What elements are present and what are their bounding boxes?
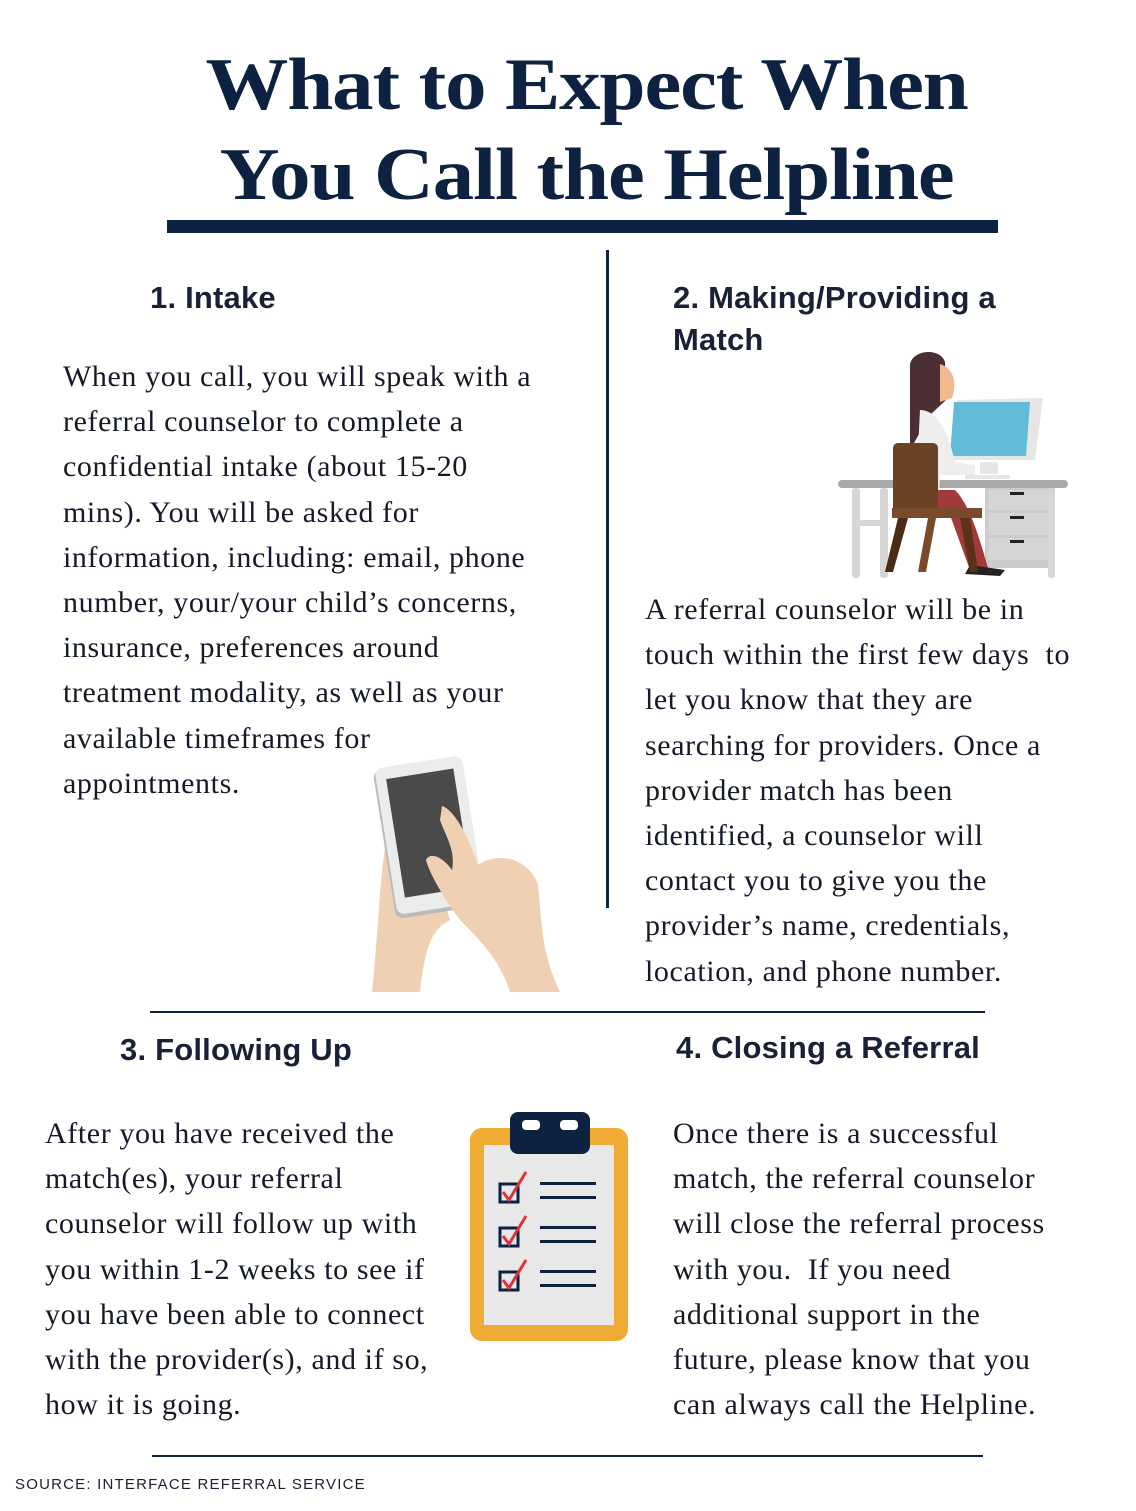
text: intake: treatment modality, as well as your bbox=[63, 676, 504, 709]
text: intake: insurance, preferences around bbox=[63, 631, 439, 664]
text: intake: number, your/your child’s concerns, bbox=[63, 586, 517, 619]
text: match: identified, a counselor will bbox=[645, 819, 983, 852]
text: intake bbox=[63, 360, 531, 800]
source: SOURCE: INTERFACE REFERRAL SERVICE bbox=[15, 1476, 366, 1493]
text: following up bbox=[45, 1117, 428, 1421]
text: following up: with the provider(s), and if so, bbox=[45, 1343, 428, 1376]
title underline bbox=[167, 220, 998, 233]
heading: match: 2. Making/Providing a bbox=[673, 280, 996, 315]
text: following up: you within 1-2 weeks to see if bbox=[45, 1253, 425, 1286]
text: match: let you know that they are bbox=[645, 683, 973, 716]
text: following up: counselor will follow up with bbox=[45, 1207, 417, 1240]
heading: match bbox=[673, 280, 996, 357]
text: closing: will close the referral process bbox=[673, 1207, 1045, 1240]
icon: hands with phone bbox=[372, 756, 560, 992]
text: intake: appointments. bbox=[63, 767, 240, 800]
text: match: A referral counselor will be in bbox=[645, 593, 1024, 626]
text: intake: information, including: email, phone bbox=[63, 541, 525, 574]
text: closing: match, the referral counselor bbox=[673, 1162, 1035, 1195]
title bbox=[205, 44, 968, 216]
text: match bbox=[645, 593, 1070, 988]
text: closing bbox=[673, 1117, 1045, 1421]
text: match: location, and phone number. bbox=[645, 955, 1002, 988]
text: match: provider match has been bbox=[645, 774, 953, 807]
text: match: touch within the first few days to bbox=[645, 638, 1070, 671]
text: closing: future, please know that you bbox=[673, 1343, 1031, 1376]
text: following up: how it is going. bbox=[45, 1388, 241, 1421]
text: following up: match(es), your referral bbox=[45, 1162, 343, 1195]
text: closing: can always call the Helpline. bbox=[673, 1388, 1036, 1421]
text: closing: with you. If you need bbox=[673, 1253, 951, 1286]
text: closing: Once there is a successful bbox=[673, 1117, 998, 1150]
text: match: searching for providers. Once a bbox=[645, 729, 1041, 762]
text: intake: available timeframes for bbox=[63, 722, 371, 755]
heading: intake: 1. Intake bbox=[150, 280, 276, 315]
icon: clipboard bbox=[470, 1112, 628, 1341]
text: intake: mins). You will be asked for bbox=[63, 496, 419, 529]
heading: closing: 4. Closing a Referral bbox=[676, 1030, 980, 1065]
text: match: contact you to give you the bbox=[645, 864, 987, 897]
heading: match: Match bbox=[673, 322, 764, 357]
text: intake: referral counselor to complete a bbox=[63, 405, 464, 438]
text: following up: After you have received the bbox=[45, 1117, 394, 1150]
text: following up: you have been able to connect bbox=[45, 1298, 425, 1331]
text: closing: additional support in the bbox=[673, 1298, 980, 1331]
title: What to Expect When bbox=[205, 44, 968, 126]
text: intake: confidential intake (about 15-20 bbox=[63, 450, 468, 483]
icon: woman at computer bbox=[838, 352, 1068, 578]
heading: following up: 3. Following Up bbox=[120, 1032, 352, 1067]
text: match: provider’s name, credentials, bbox=[645, 909, 1010, 942]
text: intake: When you call, you will speak with a bbox=[63, 360, 531, 393]
title: You Call the Helpline bbox=[220, 134, 954, 216]
